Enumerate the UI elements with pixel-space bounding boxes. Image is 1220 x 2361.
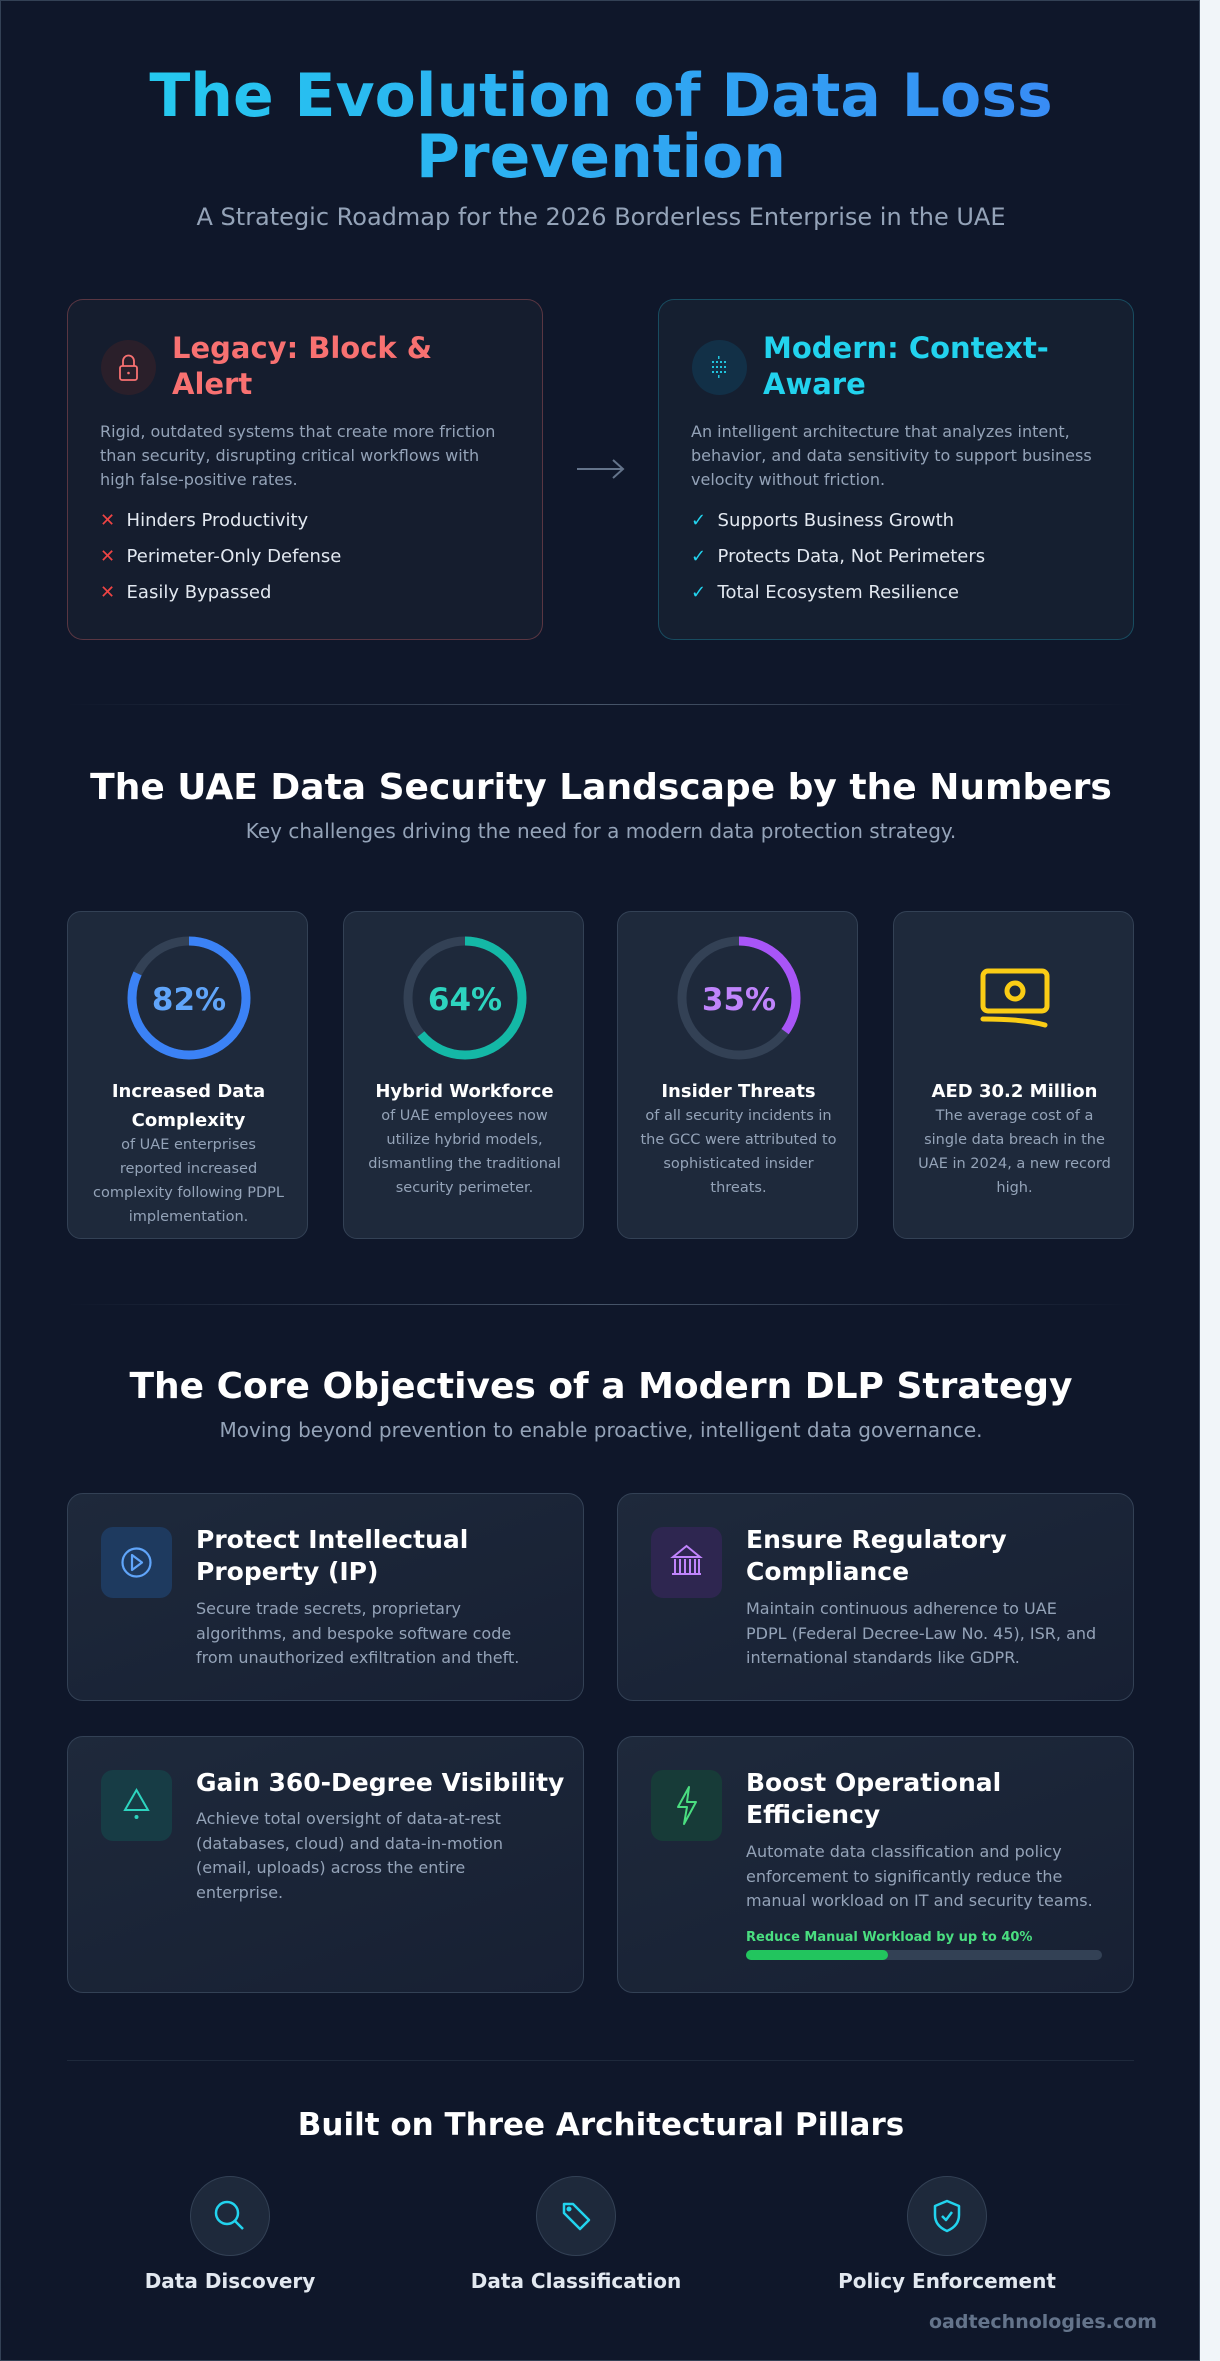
icon: play	[101, 1527, 172, 1598]
objective: IP	[67, 1493, 584, 1701]
list	[100, 510, 341, 603]
stat card 82%: Increased Data	[112, 1081, 265, 1102]
pillar: discovery: Data Discovery	[145, 2269, 315, 2293]
title: The Evolution of Data Loss	[149, 61, 1053, 131]
pillar: policy	[838, 2176, 1056, 2293]
objective: efficiency: Boost Operational Efficiency	[746, 1768, 1001, 1829]
stat card 35%	[617, 911, 858, 1239]
stat card 64%	[343, 911, 584, 1239]
heading	[172, 331, 432, 401]
objective: visibility	[67, 1736, 584, 1993]
objective: visibility: Gain 360-Degree Visibility	[196, 1768, 564, 1797]
arrow	[577, 459, 624, 479]
objective: compliance: Maintain continuous adherence to UAE	[746, 1599, 1057, 1618]
icon: alert	[101, 1770, 172, 1841]
ring chart	[128, 936, 250, 1060]
objective: compliance: PDPL (Federal Decree-Law No. 45), ISR, and	[746, 1624, 1096, 1642]
pillar: policy: Policy Enforcement	[838, 2269, 1056, 2293]
ring chart	[404, 936, 526, 1060]
title: Prevention	[416, 122, 786, 192]
objective: compliance: Ensure Regulatory Compliance	[746, 1525, 1007, 1586]
panel: modern	[658, 299, 1134, 640]
ring chart: 82%	[152, 982, 226, 1018]
title	[1, 66, 1201, 188]
stat card 82%: Complexity	[132, 1110, 245, 1131]
objective: IP: Secure trade secrets, proprietary algorithms, and bespoke software code from unauthorized exfiltration and theft.	[196, 1599, 519, 1667]
ring chart: 64%	[428, 982, 502, 1018]
stat card AED: AED 30.2 Million	[932, 1081, 1097, 1102]
pillar: discovery	[145, 2176, 315, 2293]
description: An intelligent architecture that analyzes intent, behavior, and data sensitivity to support business velocity without friction.	[691, 422, 1092, 489]
objective: visibility: Achieve total oversight of data-at-rest (databases, cloud) and data-in-motion (email, uploads) across the entire enterprise.	[196, 1809, 503, 1902]
objective: compliance: international standards like GDPR.	[746, 1648, 1020, 1667]
list	[691, 510, 985, 603]
ring chart	[678, 936, 800, 1060]
stat card 82%	[67, 911, 308, 1239]
pillar: classification: Data Classification	[471, 2269, 681, 2293]
heading: Modern: Context-	[763, 331, 1049, 365]
stat card 64%: of UAE employees now utilize hybrid models, dismantling the traditional security perimeter.	[368, 1108, 561, 1196]
list: ✓ Supports Business Growth	[691, 510, 954, 531]
heading: pillars: Built on Three Architectural Pillars	[298, 2107, 904, 2143]
icon: money	[980, 968, 1050, 1028]
stat card 82%: of UAE enterprises reported increased complexity following PDPL implementation.	[93, 1137, 284, 1225]
stat card 64%: Hybrid Workforce	[375, 1081, 554, 1102]
list: ✓ Protects Data, Not Perimeters	[691, 546, 985, 567]
objective: efficiency	[617, 1736, 1134, 1993]
heading: objectives: The Core Objectives of a Modern DLP Strategy	[129, 1366, 1073, 1407]
progress bar	[746, 1930, 1102, 1960]
heading: Alert	[172, 367, 252, 401]
list: ✓ Total Ecosystem Resilience	[691, 582, 959, 603]
heading: Aware	[763, 367, 866, 401]
heading	[763, 331, 1049, 401]
subtitle: A Strategic Roadmap for the 2026 Borderless Enterprise in the UAE	[196, 203, 1005, 231]
panel: legacy	[67, 299, 543, 640]
icon: bolt	[651, 1770, 722, 1841]
footer: oadtechnologies.com	[929, 2311, 1157, 2333]
stat card 35%: Insider Threats	[661, 1081, 816, 1102]
objective: efficiency: Automate data classification and policy enforcement to significantly reduce the manual workload on IT and security teams.	[746, 1842, 1093, 1910]
pillar: classification	[471, 2176, 681, 2293]
list: ✕ Perimeter-Only Defense	[100, 546, 341, 567]
heading: Legacy: Block &	[172, 331, 432, 365]
icon: chip	[692, 340, 747, 395]
icon: building	[651, 1527, 722, 1598]
description: Rigid, outdated systems that create more friction than security, disrupting critical workflows with high false-positive rates.	[100, 422, 495, 489]
stat card AED: The average cost of a single data breach in the UAE in 2024, a new record high.	[918, 1108, 1111, 1196]
objective: IP: Protect Intellectual Property (IP)	[196, 1525, 468, 1586]
heading: numbers: The UAE Data Security Landscape by the Numbers	[90, 767, 1112, 808]
subtitle: numbers: Key challenges driving the need for a modern data protection strategy.	[246, 819, 956, 843]
list: ✕ Easily Bypassed	[100, 582, 271, 603]
stat card 35%: of all security incidents in the GCC were attributed to sophisticated insider threats.	[640, 1108, 837, 1196]
stat card AED	[893, 911, 1134, 1239]
subtitle: objectives: Moving beyond prevention to enable proactive, intelligent data governance.	[219, 1418, 983, 1442]
list: ✕ Hinders Productivity	[100, 510, 308, 531]
ring chart: 35%	[702, 982, 776, 1018]
icon: lock	[101, 340, 156, 395]
objective: compliance	[617, 1493, 1134, 1701]
progress bar: Reduce Manual Workload by up to 40%	[746, 1930, 1032, 1945]
